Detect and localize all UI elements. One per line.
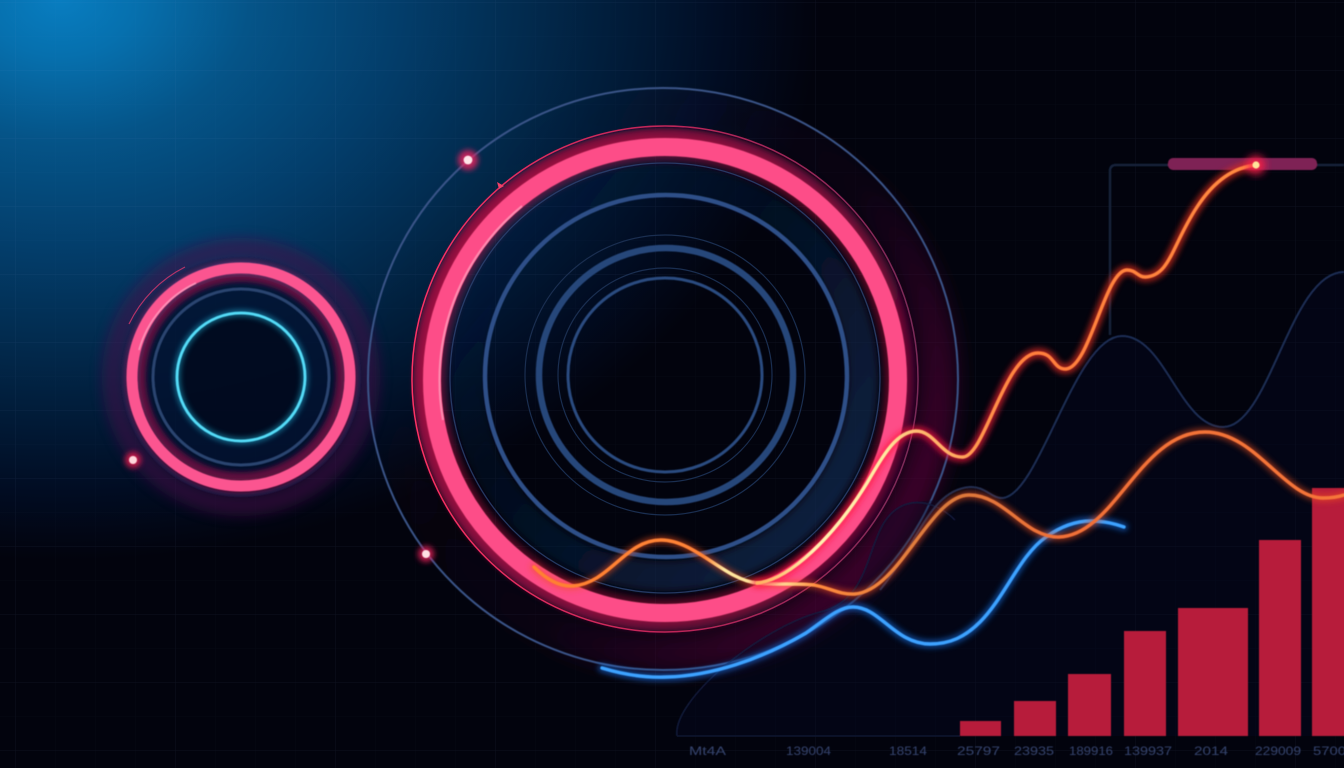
large ring gauge: [368, 88, 958, 670]
axis labels: 5700: [1313, 744, 1344, 758]
axis labels: 229009: [1255, 744, 1301, 758]
small ring gauge: [113, 249, 369, 505]
axis labels: 18514: [889, 744, 927, 758]
axis labels: Mt4A: [689, 744, 726, 758]
axis labels: 139004: [786, 744, 831, 758]
blue line: [602, 521, 1124, 677]
axis labels: 2014: [1194, 744, 1228, 758]
axis labels: 139937: [1124, 744, 1172, 758]
chart frame with highlight bar: [1110, 158, 1344, 335]
orange line lower: [534, 432, 1344, 594]
orange line upper: [757, 155, 1266, 583]
faint area curves: [677, 272, 1344, 736]
bar chart: [960, 488, 1344, 736]
axis labels: [689, 744, 1344, 758]
axis labels: 23935: [1014, 744, 1054, 758]
glowing marker dots: [125, 150, 504, 562]
axis labels: 25797: [957, 744, 1000, 758]
axis labels: 189916: [1069, 744, 1113, 758]
